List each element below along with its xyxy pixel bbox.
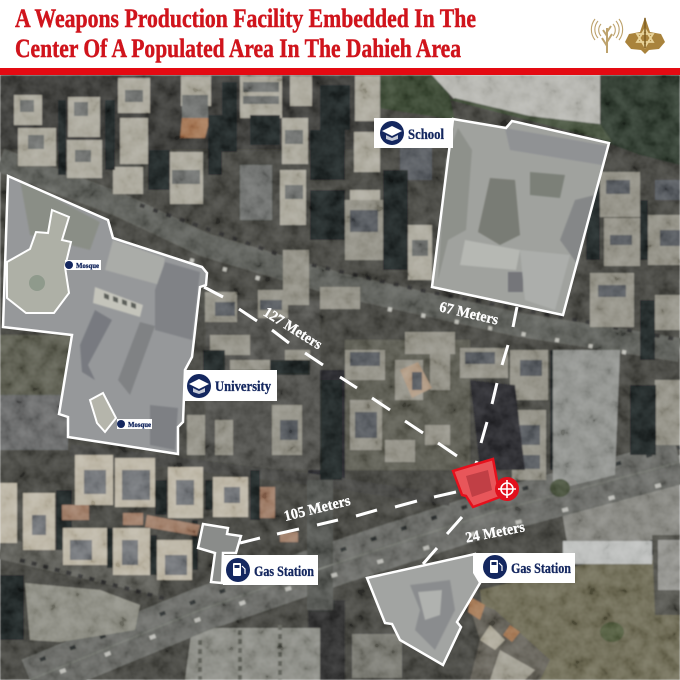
label: mosque upper [65,260,101,270]
roads [0,160,680,680]
buildings: top-left [14,76,432,280]
red divider bar [0,68,680,75]
panel: school compound [432,119,609,315]
dark alleys [0,75,380,150]
label: gas station west [223,555,318,585]
label: gas station west: Gas Station [254,564,315,580]
icon: graduation cap [187,374,211,398]
panel: gas station east footprint [367,554,480,665]
mosque footprint small [90,393,116,432]
icon: fuel pump [226,558,250,582]
label: 127 meters: 127 Meters [260,305,325,353]
label: mosque lower [117,419,152,429]
parked cars [20,205,680,680]
fields [480,540,680,680]
icon: fuel pump [483,555,507,579]
target facility [453,459,500,507]
panel: university compound [3,176,207,454]
label: 105 meters: 105 Meters [282,493,352,525]
icon: target crosshair [495,477,519,501]
buildings: top-middle / right [187,172,680,480]
label: university [185,370,277,401]
distance line: 24 meters [423,517,462,564]
label: school: School [408,127,444,143]
mosque footprint [7,210,71,313]
label: 24 meters: 24 Meters [464,519,526,547]
label: mosque lower: Mosque [128,420,152,429]
label: gas station east [473,553,575,583]
label: gas station east: Gas Station [511,561,572,577]
title: A Weapons Production Facility Embedded In The [15,4,476,33]
header background [0,0,680,75]
label: 67 meters: 67 Meters [438,299,500,329]
icon: graduation cap [380,121,404,145]
label: mosque upper: Mosque [76,261,100,270]
label: school [374,118,453,148]
icon: army emblem [625,17,665,54]
distance line: 127 meters [204,287,457,456]
distance line: 105 meters [240,492,456,543]
green and lots [378,75,455,120]
label: university: University [215,379,271,395]
buildings: lower rows [0,455,248,580]
title [15,4,476,63]
title: Center Of A Populated Area In The Dahieh Area [15,34,461,63]
icon: radio corps emblem [591,19,623,53]
panel: gas station west footprint [198,524,241,583]
distance line: 67 meters [475,307,517,466]
